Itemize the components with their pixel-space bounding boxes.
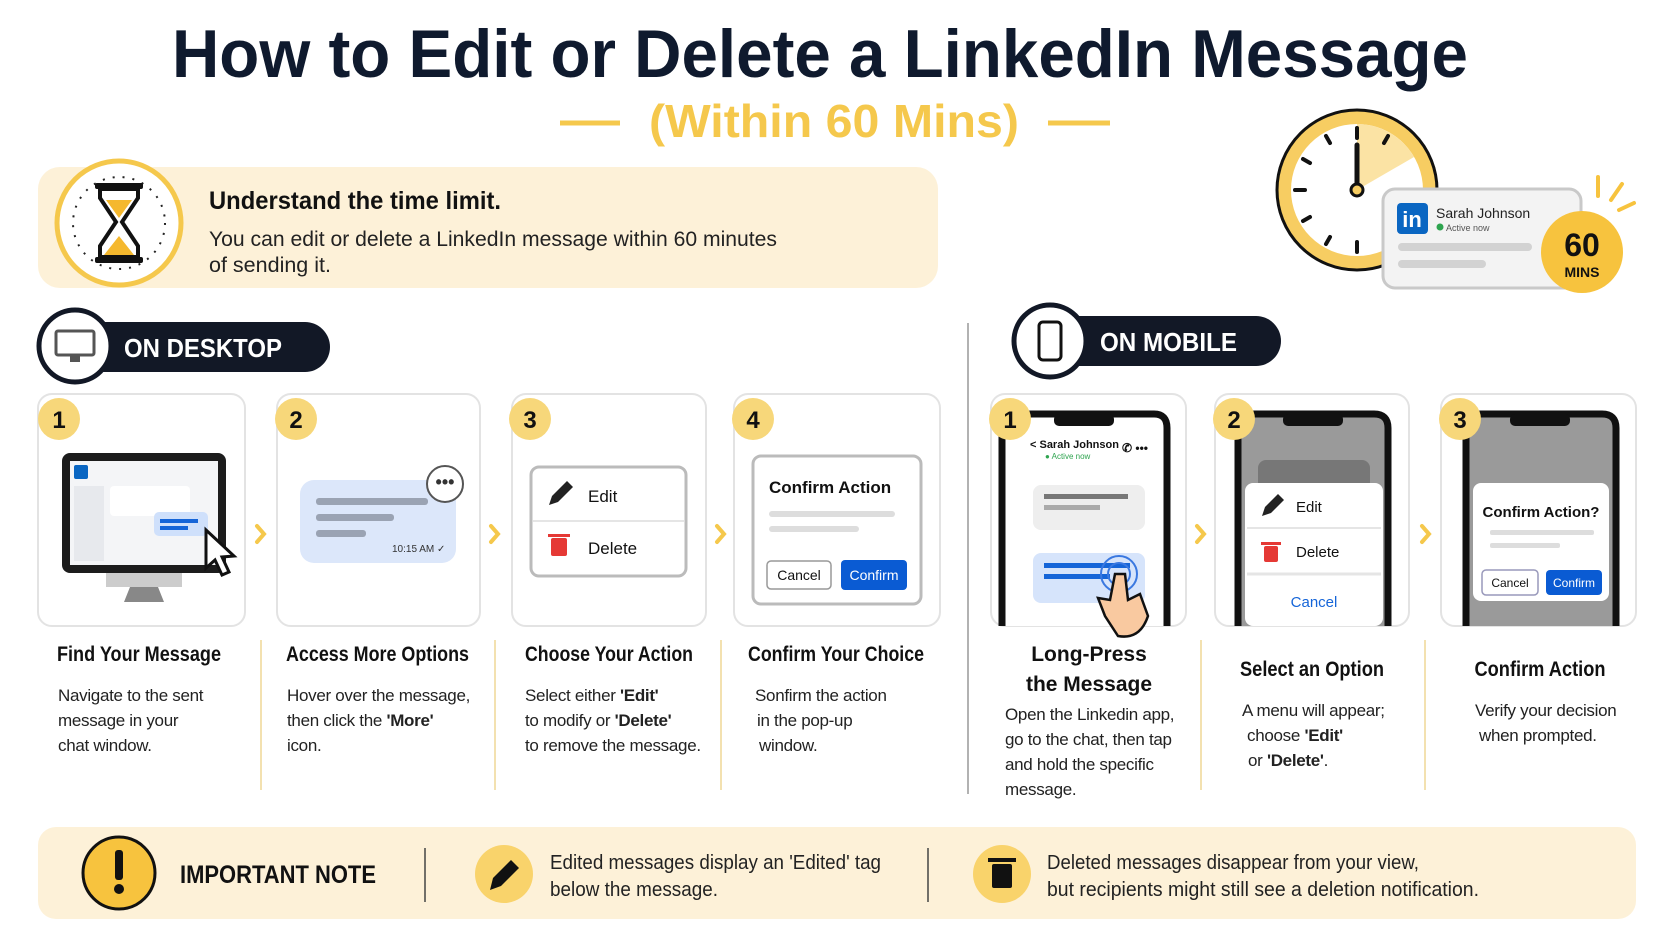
icon: trash bbox=[973, 845, 1031, 903]
text: mobile step titles and descriptions: or 'Delete'. bbox=[1248, 751, 1328, 770]
icon: pencil bbox=[475, 845, 533, 903]
text: mobile step titles and descriptions: and hold the specific bbox=[1005, 755, 1154, 774]
icon: phone menu: Delete bbox=[1296, 544, 1339, 561]
icon: edit delete menu: Edit bbox=[588, 487, 618, 506]
text: mobile step titles and descriptions: Select an Option bbox=[1240, 658, 1384, 681]
text: edited note: below the message. bbox=[550, 879, 718, 901]
text: mobile step titles and descriptions: Verify your decision bbox=[1475, 701, 1616, 720]
icon: confirm dialog bbox=[753, 456, 921, 604]
text: mobile step titles and descriptions: message. bbox=[1005, 780, 1076, 799]
panel: mobile step 3 bbox=[1439, 394, 1636, 626]
text: mobile step titles and descriptions: Confirm Action bbox=[1474, 658, 1606, 681]
icon: clock with message card: MINS bbox=[1564, 264, 1600, 280]
icon: message bubble: ••• bbox=[436, 472, 454, 492]
panel: desktop step 3: 3 bbox=[523, 407, 537, 434]
icon: confirm dialog: Confirm bbox=[849, 567, 899, 583]
text: desktop step titles and descriptions: chat window. bbox=[58, 736, 152, 755]
title: How to Edit or Delete a LinkedIn Message bbox=[172, 16, 1468, 92]
heading: understand the time limit: Understand the time limit. bbox=[209, 187, 501, 215]
panel: desktop step 1: 1 bbox=[52, 407, 66, 434]
icon: warning bbox=[83, 837, 155, 909]
panel: desktop step 4 bbox=[732, 394, 940, 626]
icon: hourglass bbox=[57, 161, 181, 285]
panel: time limit bbox=[38, 161, 938, 288]
icon: confirm dialog: Cancel bbox=[777, 567, 821, 583]
icon: phone menu bbox=[1238, 414, 1388, 626]
heading: on desktop bbox=[39, 310, 330, 382]
heading: on mobile bbox=[1014, 305, 1281, 377]
icon: message bubble bbox=[300, 466, 463, 563]
panel: desktop step 2: 2 bbox=[289, 407, 303, 434]
heading: on desktop: ON DESKTOP bbox=[124, 333, 282, 363]
text: desktop step titles and descriptions: Access More Options bbox=[286, 643, 469, 666]
icon: phone confirm: Confirm Action? bbox=[1483, 504, 1599, 521]
icon: phone long-press: < Sarah Johnson bbox=[1030, 439, 1119, 451]
panel: mobile step 1 bbox=[989, 394, 1186, 637]
arrows: chevrons bbox=[257, 526, 1429, 542]
text block: time limit: You can edit or delete a LinkedIn message within 60 minutes bbox=[209, 228, 777, 251]
text: desktop step titles and descriptions: in the pop-up bbox=[757, 711, 852, 730]
text: mobile step titles and descriptions: Long-Press bbox=[1031, 643, 1147, 666]
icon: phone long-press: ● Active now bbox=[1045, 452, 1091, 461]
text: desktop step titles and descriptions: then click the 'More' bbox=[287, 711, 434, 730]
icon: clock with message card: 60 bbox=[1564, 227, 1600, 263]
icon: edit delete menu bbox=[531, 467, 686, 576]
text: deleted note bbox=[1047, 852, 1479, 901]
icon: clock with message card: in bbox=[1402, 207, 1422, 232]
text: mobile step titles and descriptions: choose 'Edit' bbox=[1247, 726, 1343, 745]
text: desktop step titles and descriptions: Find Your Message bbox=[57, 643, 221, 666]
icon: edit delete menu: Delete bbox=[588, 539, 637, 558]
text: deleted note: Deleted messages disappear from your view, bbox=[1047, 852, 1419, 874]
icon: clock with message card: Sarah Johnson bbox=[1436, 205, 1530, 221]
text: mobile step titles and descriptions: go to the chat, then tap bbox=[1005, 730, 1172, 749]
panel: mobile step 1: 1 bbox=[1003, 407, 1017, 434]
text: mobile step titles and descriptions: when prompted. bbox=[1478, 726, 1597, 745]
text: edited note: Edited messages display an 'Edited' tag bbox=[550, 852, 881, 874]
text: mobile step titles and descriptions bbox=[1005, 643, 1616, 799]
panel: important note: IMPORTANT NOTE bbox=[180, 861, 376, 889]
icon: confirm dialog: Confirm Action bbox=[769, 478, 891, 497]
icon: message bubble: 10:15 AM ✓ bbox=[392, 544, 445, 555]
icon: phone menu: Edit bbox=[1296, 499, 1323, 516]
text: desktop step titles and descriptions bbox=[57, 643, 924, 755]
text: mobile step titles and descriptions: the Message bbox=[1026, 673, 1152, 696]
text: desktop step titles and descriptions: to modify or 'Delete' bbox=[525, 711, 672, 730]
icon: monitor bbox=[62, 453, 234, 602]
subtitle: (Within 60 Mins) bbox=[649, 95, 1019, 147]
panel: desktop step 4: 4 bbox=[746, 407, 760, 434]
icon: phone confirm: Confirm bbox=[1553, 576, 1595, 590]
icon: phone confirm: Cancel bbox=[1491, 576, 1529, 590]
text: desktop step titles and descriptions: Choose Your Action bbox=[525, 643, 693, 666]
icon: phone menu: Cancel bbox=[1291, 594, 1337, 611]
panel: important note bbox=[38, 827, 1636, 919]
text: desktop step titles and descriptions: Confirm Your Choice bbox=[748, 643, 924, 666]
text: desktop step titles and descriptions: Sonfirm the action bbox=[755, 686, 887, 705]
text block: time limit: of sending it. bbox=[209, 254, 331, 277]
text: deleted note: but recipients might still see a deletion notification. bbox=[1047, 879, 1479, 901]
panel: mobile step 2: 2 bbox=[1227, 407, 1241, 434]
panel: desktop step 3 bbox=[509, 394, 706, 626]
panel: desktop step 2 bbox=[275, 394, 480, 626]
text: desktop step titles and descriptions: to remove the message. bbox=[525, 736, 701, 755]
panel: mobile step 2 bbox=[1213, 394, 1409, 626]
panel: desktop step 1 bbox=[38, 394, 245, 626]
text: mobile step titles and descriptions: A menu will appear; bbox=[1242, 701, 1385, 720]
icon: phone confirm bbox=[1466, 414, 1616, 626]
text: desktop step titles and descriptions: window. bbox=[758, 736, 817, 755]
icon: clock with message card bbox=[1277, 110, 1634, 293]
text: desktop step titles and descriptions: Navigate to the sent bbox=[58, 686, 204, 705]
text: desktop step titles and descriptions: icon. bbox=[287, 736, 321, 755]
icon: phone long-press bbox=[1002, 414, 1167, 637]
text: desktop step titles and descriptions: Select either 'Edit' bbox=[525, 686, 659, 705]
text: edited note bbox=[550, 852, 881, 901]
text block: time limit bbox=[209, 228, 777, 277]
text: desktop step titles and descriptions: Hover over the message, bbox=[287, 686, 470, 705]
icon: phone long-press: ✆ ••• bbox=[1122, 441, 1148, 455]
heading: on mobile: ON MOBILE bbox=[1100, 327, 1237, 357]
panel: mobile step 3: 3 bbox=[1453, 407, 1467, 434]
text: desktop step titles and descriptions: message in your bbox=[58, 711, 179, 730]
icon: clock with message card: Active now bbox=[1446, 223, 1490, 233]
text: mobile step titles and descriptions: Open the Linkedin app, bbox=[1005, 705, 1174, 724]
